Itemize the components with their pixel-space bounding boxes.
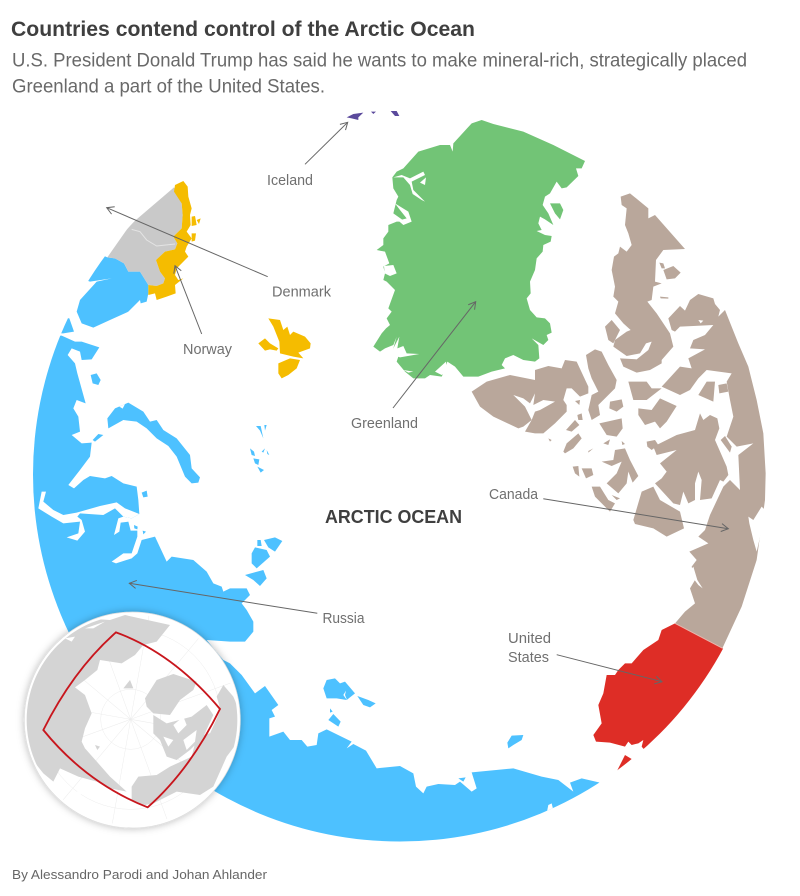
label and arrow: United States: States xyxy=(508,650,549,666)
label and arrow: United States xyxy=(508,631,662,682)
label: Arctic Ocean: ARCTIC OCEAN xyxy=(325,507,462,527)
subtitle xyxy=(12,50,747,98)
country: Norway xyxy=(148,181,311,378)
label and arrow: Greenland xyxy=(351,302,476,432)
label and arrow: Norway xyxy=(175,266,233,358)
country: Russia, eastern islands xyxy=(323,678,523,782)
label and arrow: Canada xyxy=(489,487,728,529)
inset: locator globe xyxy=(10,612,243,828)
country: United States (Alaska) xyxy=(593,623,724,770)
inset: red map extent outline xyxy=(43,632,220,807)
subtitle: U.S. President Donald Trump has said he wants to make mineral-rich, strategically placed xyxy=(12,50,747,72)
country: Finland and Sweden (grey) xyxy=(107,187,183,286)
label and arrow: United States: United xyxy=(508,631,551,647)
map: Arctic countries xyxy=(33,111,766,842)
country: Canada, mainland and archipelago xyxy=(472,294,766,648)
byline: By Alessandro Parodi and Johan Ahlander xyxy=(12,867,268,882)
country: Russia xyxy=(33,256,600,842)
country: Greenland xyxy=(373,120,585,378)
subtitle: Greenland a part of the United States. xyxy=(12,76,325,98)
title: Countries contend control of the Arctic Ocean xyxy=(11,18,475,41)
label and arrow: Russia: Russia xyxy=(322,611,365,627)
label and arrow: Denmark xyxy=(107,208,332,300)
country: Iceland xyxy=(347,111,399,120)
label and arrow: Norway: Norway xyxy=(183,342,233,358)
label and arrow: Russia xyxy=(129,583,365,627)
label and arrow: Iceland: Iceland xyxy=(267,173,313,189)
label and arrow: Greenland: Greenland xyxy=(351,416,418,432)
country: Canada, northern islands xyxy=(605,193,685,373)
label and arrow: Denmark: Denmark xyxy=(272,284,332,300)
label and arrow: Canada: Canada xyxy=(489,487,539,503)
label and arrow: Iceland xyxy=(267,122,348,189)
